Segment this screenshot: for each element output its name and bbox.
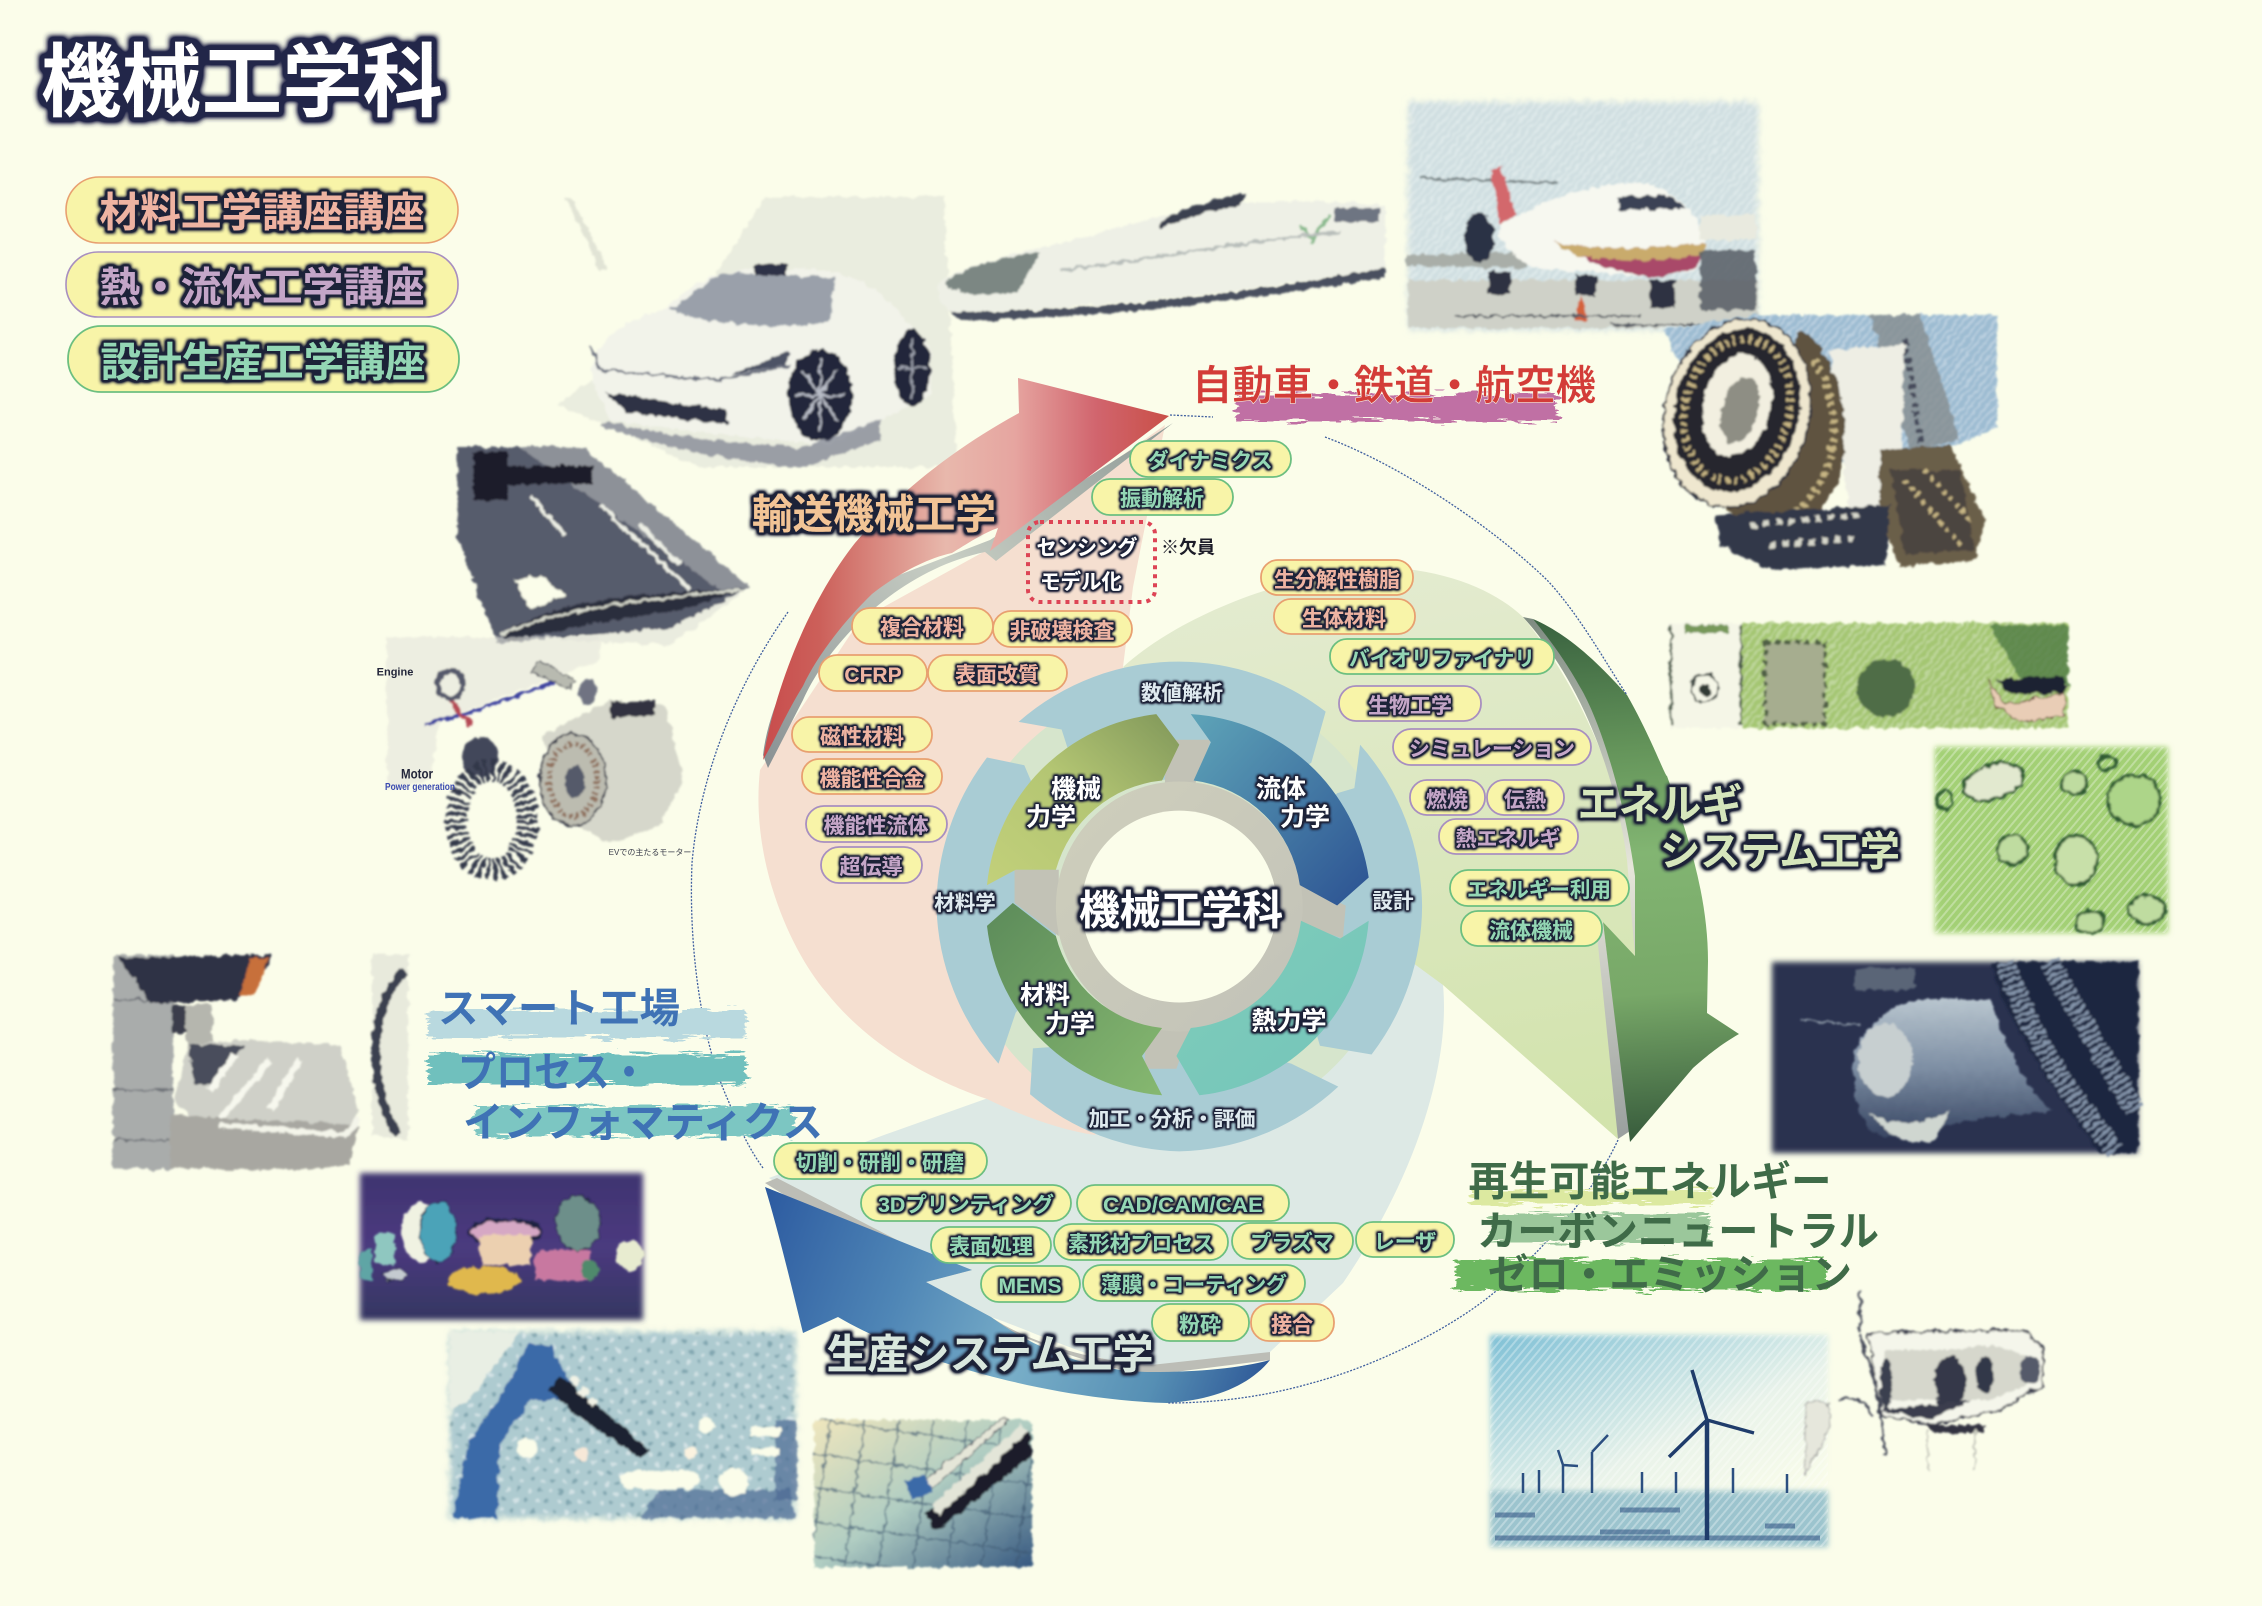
heading: energy systems engineering: システム工学 (1660, 828, 1900, 874)
research tags (774, 441, 1629, 1341)
arrow: production systems (blue) (765, 1178, 1270, 1403)
brush: smart factory (428, 1010, 794, 1136)
tag (1054, 1224, 1228, 1260)
photo: wind turbine nacelle cutaway (1805, 1290, 2043, 1475)
swirl: pale blue production band (769, 800, 1444, 1371)
tag: 熱エネルギ (1456, 828, 1560, 851)
photo: optical lenses (360, 1173, 644, 1320)
photo: jet engine (1644, 303, 1997, 570)
legend item: design production: 設計生産工学講座 (100, 340, 426, 386)
tag: プラズマ (1250, 1231, 1334, 1255)
heading: renewable energy carbon neutral zero emission: ゼロ・エミッション (1488, 1252, 1852, 1298)
tag: エネルギー利用 (1467, 879, 1611, 902)
tag (928, 655, 1067, 691)
ring label: department name: 機械工学科 (1079, 888, 1283, 934)
swirl: peach transport band (758, 425, 1200, 1135)
heading: energy systems engineering: エネルギ (1578, 782, 1742, 828)
segment: fluid mechanics (1191, 714, 1369, 906)
heading: smart factory process informatics (438, 986, 823, 1146)
photo: offshore wind farm (1490, 1335, 1828, 1547)
dotted swirl outline (691, 415, 1627, 1403)
heading: renewable energy carbon neutral zero emission: カーボンニュートラル (1477, 1208, 1879, 1254)
ring segment: processing and evaluation (1030, 1043, 1338, 1151)
photo: plants and hand (1669, 623, 2068, 728)
tag (1232, 1223, 1353, 1259)
tag: 機能性流体 (824, 815, 928, 838)
segment: thermodynamics (1176, 921, 1369, 1095)
photo: milling machine impeller (113, 955, 408, 1170)
swirl: light green energy band (1123, 569, 1635, 1139)
arrow shadow (1523, 617, 1645, 960)
tag: 振動解析 (1120, 488, 1204, 511)
dotted box: sensing and modeling: モデル化 (1040, 570, 1122, 594)
tag: CFRP (844, 664, 902, 687)
heading: smart factory process informatics: スマート工場 (438, 986, 680, 1032)
tag: 粉砕 (1179, 1314, 1221, 1337)
tag: 接合 (1271, 1314, 1313, 1337)
label: EV motor: EVでの主たるモーター (609, 847, 691, 857)
heading: vehicles rail aircraft: 自動車・鉄道・航空機 (1192, 362, 1596, 408)
ring label: fluid mechanics (1256, 776, 1330, 832)
tag (1077, 1185, 1289, 1221)
ring label: processing analysis evaluation: 加工・分析・評価 (1088, 1108, 1256, 1131)
legend item: materials (66, 177, 458, 243)
photo: robot arm on circuit board (450, 1332, 797, 1518)
photo: gas turbine rotor (1772, 962, 2138, 1153)
ring label: materials science: 材料学 (934, 892, 996, 915)
tag: シミュレーション (1409, 738, 1575, 761)
tag (981, 1266, 1080, 1302)
tag: 燃焼 (1426, 789, 1468, 812)
tag (1251, 1304, 1334, 1341)
tag (1152, 1304, 1249, 1341)
knowledge ring (936, 662, 1422, 1151)
ring label: mechanics of machines: 力学 (1026, 804, 1076, 832)
tag (1410, 780, 1485, 815)
photo: water drops on leaf (1935, 747, 2168, 933)
tag (806, 806, 947, 842)
ring label: fluid mechanics: 流体 (1256, 776, 1306, 804)
tag (1083, 1265, 1305, 1301)
tag: 超伝導 (840, 856, 902, 879)
ring segment: design (1297, 745, 1422, 1054)
ring label: fluid mechanics: 力学 (1280, 804, 1330, 832)
tag (852, 608, 993, 644)
tag (774, 1143, 987, 1179)
tag (1261, 560, 1413, 595)
title: 機械工学科 (41, 38, 443, 127)
legend item: materials: 材料工学講座講座 (100, 190, 424, 236)
tag: 3Dプリンティング (878, 1193, 1054, 1217)
tag: 生分解性樹脂 (1274, 569, 1400, 592)
ring label: mechanics of materials: 材料 (1020, 982, 1070, 1010)
ring backdrop (958, 682, 1400, 1131)
ring label: mechanics of machines (1026, 776, 1101, 832)
tag (861, 1185, 1071, 1221)
legend item: thermal fluid (66, 252, 458, 317)
legend item: thermal fluid: 熱・流体工学講座 (100, 264, 424, 310)
tag (1330, 639, 1554, 674)
brush: transport heading (1236, 394, 1558, 421)
tag (1339, 686, 1481, 721)
tag: 磁性材料 (820, 726, 904, 749)
tag: 切削・研削・研磨 (796, 1152, 964, 1175)
photo: wing cross-section (457, 447, 750, 645)
tag (802, 759, 942, 794)
heading: smart factory process informatics: プロセス・ (458, 1050, 648, 1096)
ring segment: materials science (936, 758, 1056, 1064)
tag: 機能性合金 (820, 768, 924, 791)
arrow: energy systems (green) (1523, 617, 1739, 1142)
ring label: mechanics of materials (1020, 982, 1095, 1038)
dotted box: sensing and modeling: センシング (1036, 536, 1138, 560)
ring label: mechanics of machines: 機械 (1051, 776, 1101, 804)
legend item: design production (68, 326, 459, 392)
tag (1092, 479, 1233, 515)
tag (931, 1227, 1051, 1263)
grey hub with spokes (1015, 740, 1346, 1069)
dotted box: sensing and modeling (1028, 522, 1155, 602)
photo: regional jet (1406, 102, 1758, 330)
tag: 薄膜・コーティング (1101, 1273, 1287, 1297)
ring label: mechanics of materials: 力学 (1045, 1010, 1095, 1038)
heading: energy systems engineering (1578, 782, 1900, 874)
label: engine: Engine (377, 666, 413, 678)
tag (1274, 599, 1415, 634)
photo: bullet train (938, 194, 1385, 320)
tag (819, 655, 927, 691)
tag: 複合材料 (880, 617, 964, 640)
brush: renewable energy (1456, 1190, 1826, 1290)
photo: hybrid drivetrain and motor (377, 637, 691, 870)
heading: smart factory process informatics: インフォマティクス (463, 1100, 823, 1146)
tag: 素形材プロセス (1068, 1233, 1214, 1256)
label: motor: Motor (401, 766, 433, 782)
ring label: design: 設計 (1372, 890, 1414, 913)
tag (1461, 911, 1602, 946)
photo: tweezers and chip wafer (814, 1420, 1032, 1567)
note: vacant: ※欠員 (1161, 536, 1215, 558)
tag (993, 611, 1132, 647)
tag (1356, 1222, 1454, 1257)
heading: renewable energy carbon neutral zero emission (1468, 1158, 1879, 1298)
ring label: numerical analysis: 数値解析 (1141, 682, 1223, 705)
tag (1393, 729, 1591, 765)
tag: ダイナミクス (1148, 449, 1272, 473)
heading: transport machinery engineering: 輸送機械工学 (752, 492, 996, 538)
ring segment: numerical analysis (1019, 662, 1326, 788)
arrow shadow (765, 1178, 1270, 1375)
ring label: thermodynamics: 熱力学 (1251, 1008, 1327, 1036)
segment: mechanics of materials (987, 903, 1162, 1095)
tag (1487, 780, 1564, 815)
tag: 生物工学 (1368, 695, 1452, 718)
tag: 伝熱 (1504, 789, 1546, 812)
arrow shadow (763, 423, 1173, 768)
tag: 表面改質 (955, 664, 1039, 687)
label: power generation: Power generation (385, 782, 455, 793)
tag: 流体機械 (1489, 920, 1573, 943)
tag: バイオリファイナリ (1349, 648, 1535, 671)
arrow: transport (red) (763, 378, 1173, 768)
legend: course groups (66, 177, 459, 392)
tag (792, 717, 932, 752)
heading: production systems engineering: 生産システム工学 (826, 1332, 1154, 1378)
tag: MEMS (998, 1275, 1062, 1298)
tag: 非破壊検査 (1010, 620, 1114, 643)
tag (1450, 870, 1629, 906)
tag (1439, 819, 1578, 854)
tag: 生体材料 (1302, 608, 1386, 631)
heading: renewable energy carbon neutral zero emission: 再生可能エネルギー (1468, 1158, 1832, 1204)
tag (1130, 441, 1291, 477)
tag (821, 847, 922, 883)
tag: CAD/CAM/CAE (1103, 1194, 1263, 1217)
tag: 表面処理 (949, 1236, 1033, 1259)
photo: concept car sketch (558, 197, 957, 468)
segment: mechanics of machines (987, 714, 1179, 885)
tag: レーザ (1374, 1231, 1436, 1254)
